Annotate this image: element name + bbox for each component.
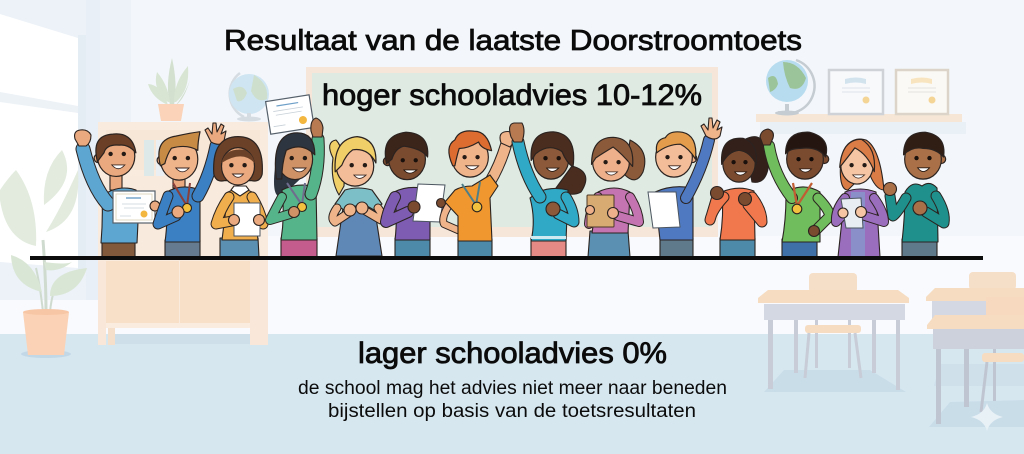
wall shelf <box>756 114 966 134</box>
title: Resultaat van de laatste Doorstroomtoets <box>224 25 802 57</box>
child 9 <box>586 137 645 257</box>
heading: hoger schooladvies: hoger schooladvies 10-12% <box>322 79 702 112</box>
child 7 <box>443 131 515 257</box>
school desks far right <box>926 272 1024 427</box>
explanation text <box>298 378 727 422</box>
school desk and chair centre-right <box>758 273 909 392</box>
child 3 <box>214 137 264 257</box>
explanation text: bijstellen op basis van de toetsresultaten <box>328 401 696 422</box>
globe left <box>229 73 269 122</box>
horizontal baseline <box>30 256 983 260</box>
child 12 <box>760 129 830 257</box>
child 1 <box>75 130 160 257</box>
child 2 <box>157 123 226 257</box>
sparkle <box>971 403 1003 431</box>
child 13 <box>836 139 884 257</box>
explanation text: de school mag het advies niet meer naar beneden <box>298 378 727 399</box>
globe right <box>766 60 815 116</box>
floor <box>0 334 1024 454</box>
lower wall <box>0 236 1024 335</box>
chalkboard <box>306 67 718 237</box>
child 10 <box>648 118 722 257</box>
framed certificate left <box>829 70 883 114</box>
framed certificate right <box>896 70 948 114</box>
wall background <box>0 0 1024 335</box>
child 8 <box>510 123 586 257</box>
child 4 <box>266 95 323 257</box>
small plant on cabinet <box>148 58 190 121</box>
child 11 <box>710 137 769 257</box>
bookshelf cabinet <box>98 122 268 345</box>
window <box>0 0 131 300</box>
heading: lager schooladvies: lager schooladvies 0% <box>358 337 667 370</box>
child 6 <box>383 132 446 257</box>
child 14 <box>884 132 946 257</box>
potted plant on the floor <box>0 150 87 358</box>
child 5 <box>330 137 382 256</box>
